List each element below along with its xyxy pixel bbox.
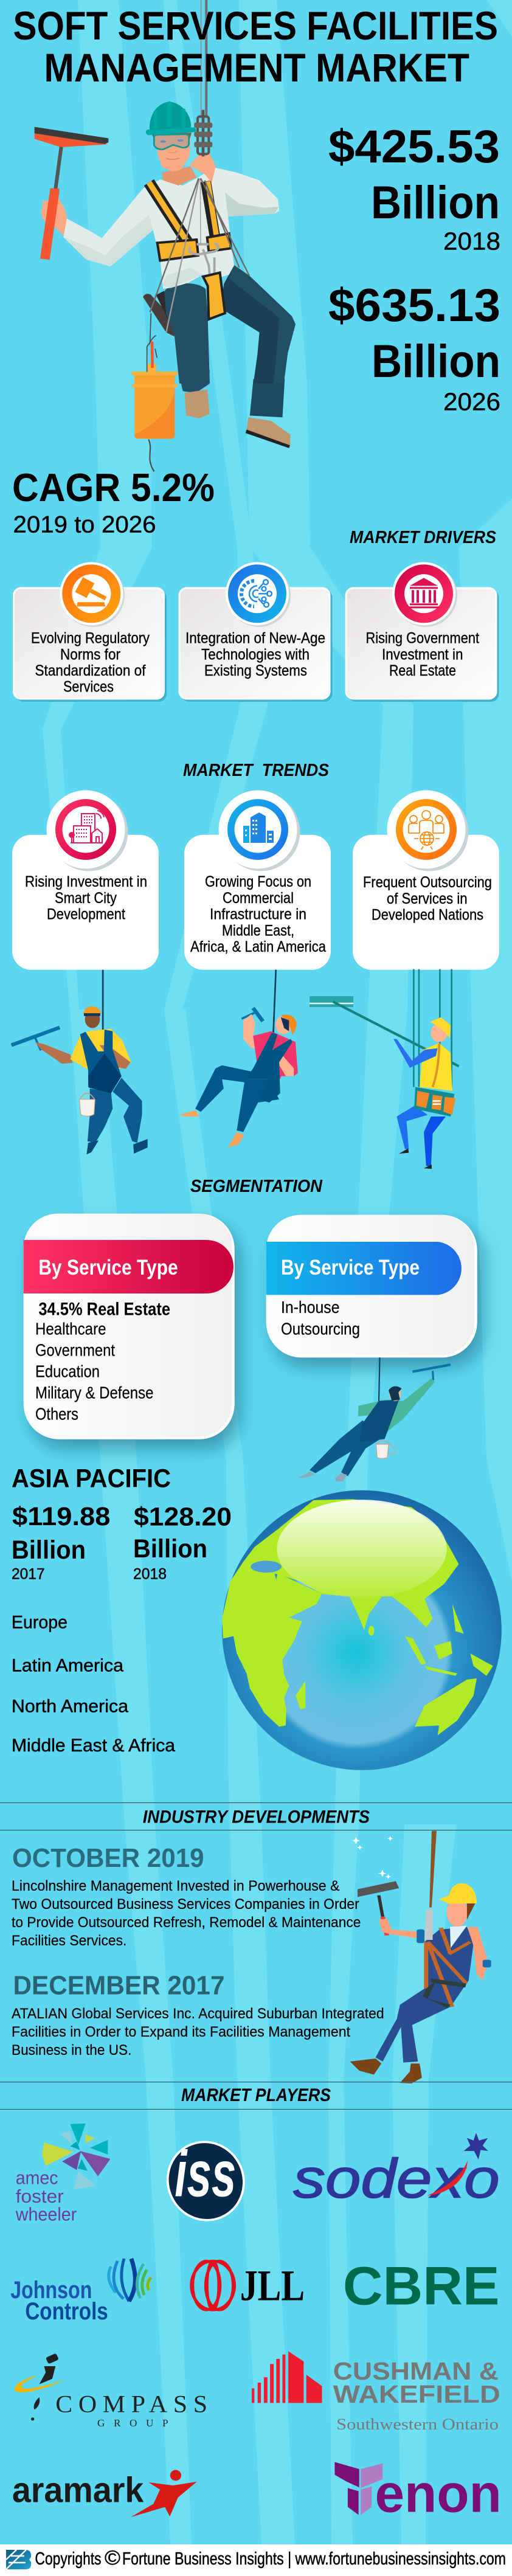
logo: Cushman & Wakefield: Southwestern Ontario (336, 2415, 499, 2433)
shirt (63, 167, 279, 289)
label (190, 873, 326, 955)
text block: october 2019: to Provide Outsourced Refresh, Remodel & Maintenance (12, 1914, 361, 1931)
title: MANAGEMENT MARKET (44, 45, 469, 90)
text block: other regions (12, 1613, 175, 1756)
label: Infrastructure in (210, 906, 306, 923)
text block: asia pacific: $128.20 (134, 1503, 232, 1532)
logo: Compass Group: COMPASS (55, 2390, 207, 2417)
illustration: hero window cleaner (35, 0, 296, 471)
text block: asia pacific (12, 1464, 232, 1583)
illustration: worker with long pole (310, 969, 458, 1169)
text block: asia pacific: Billion (12, 1536, 86, 1565)
market size 2018: $425.53 (328, 121, 500, 173)
upper body and tools (35, 0, 296, 384)
text block: other regions: North America (12, 1697, 128, 1716)
copyright text: Copyrights (35, 2549, 101, 2569)
heading: market drivers: MARKET DRIVERS (350, 528, 497, 547)
label: Rising Government (366, 629, 479, 646)
panel: by service type, end use: Education (35, 1362, 100, 1381)
label: Smart City (55, 890, 117, 907)
panel: driver 3 (346, 562, 499, 702)
logos (10, 2124, 502, 2524)
icon: gear network (241, 580, 272, 607)
logo: Compass Group: GROUP (97, 2417, 168, 2429)
panel: by service type, sourcing: In-house (281, 1298, 339, 1317)
CAGR: CAGR 5.2% (12, 465, 215, 510)
text block: asia pacific: 2017 (12, 1566, 45, 1583)
copyright text: © (105, 2546, 120, 2569)
CAGR (12, 465, 215, 538)
bucket rope (147, 313, 157, 372)
logo: Johnson Controls: Controls (25, 2298, 108, 2325)
logo: ISS (159, 2134, 253, 2228)
label: Real Estate (389, 662, 456, 679)
icon: gavel (75, 577, 106, 606)
text block: asia pacific: 2018 (133, 1566, 167, 1583)
icon: government building (409, 578, 439, 608)
label: Growing Focus on (205, 873, 311, 890)
label: Middle East, (222, 923, 294, 940)
panel: by service type, end use: Others (35, 1405, 78, 1423)
text block: asia pacific: $119.88 (12, 1502, 111, 1531)
logo: ISS: iss (175, 2138, 236, 2210)
head and hand (146, 102, 196, 185)
illustration: worker with pink shirt (179, 970, 298, 1148)
panel: by service type, end use: Government (35, 1340, 115, 1359)
text block: december 2017 (12, 1970, 384, 2058)
heading: industry developments: INDUSTRY DEVELOPMENTS (143, 1807, 370, 1827)
label (185, 629, 325, 679)
panel: driver 2 (179, 562, 332, 702)
panel: driver 1 (13, 562, 167, 702)
text block: october 2019: Lincolnshire Management Invested in Powerhouse & (12, 1878, 339, 1894)
market size 2018 (328, 121, 500, 255)
logo: Johnson Controls: Johnson (10, 2277, 92, 2304)
logo: JLL (192, 2261, 305, 2310)
text block: december 2017: DECEMBER 2017 (13, 1970, 225, 2000)
label: Development (47, 906, 125, 923)
logo: Johnson Controls (10, 2259, 151, 2325)
text block: december 2017: Facilities in Order to Expand its Facilities Management (12, 2024, 350, 2040)
label: Norms for (60, 646, 120, 663)
logo: Cushman & Wakefield: WAKEFIELD (333, 2380, 500, 2408)
hand on rope and clamp (190, 110, 216, 182)
illustration: worker with yellow helmet (350, 1831, 491, 2083)
CAGR: 2019 to 2026 (13, 511, 156, 538)
text block: october 2019: OCTOBER 2019 (12, 1843, 204, 1873)
illustration: worker hanging from panel (298, 1357, 451, 1481)
text block: other regions: Europe (12, 1613, 67, 1633)
icon: smart city (69, 811, 104, 843)
icon: commercial buildings (243, 812, 274, 843)
label: Services (63, 679, 114, 696)
label: Standardization of (35, 662, 146, 679)
harness (149, 178, 249, 333)
footer (0, 2544, 512, 2576)
label: Frequent Outsourcing (363, 874, 492, 891)
label: Developed Nations (372, 906, 483, 923)
text block: asia pacific: ASIA PACIFIC (12, 1464, 171, 1494)
logo: Tenon: enon (375, 2464, 502, 2524)
panel: trend 2 (184, 791, 331, 970)
text block: october 2019 (12, 1843, 361, 1949)
panel: by service type, end use: By Service Type (38, 1256, 178, 1279)
logo: sodexo: sodexo (293, 2147, 500, 2209)
text block: october 2019: Facilities Services. (12, 1933, 126, 1949)
label: Commercial (223, 890, 294, 907)
text block: asia pacific: Billion (133, 1534, 207, 1563)
label: Evolving Regulatory (31, 629, 150, 646)
icon: Fortune Business Insights logo (6, 2550, 31, 2569)
text block: december 2017: ATALIAN Global Services Inc. Acquired Suburban Integrated (12, 2006, 384, 2022)
label: Rising Investment in (25, 873, 147, 890)
panel: trend 1 (12, 791, 159, 970)
market size 2026: 2026 (443, 388, 500, 416)
label (31, 629, 150, 696)
market size 2026: Billion (372, 336, 500, 387)
panel: by service type, end use: Military & Defense (35, 1383, 153, 1402)
title (13, 3, 498, 90)
panel: by service type, sourcing: Outsourcing (281, 1320, 360, 1338)
icon: people and globe (409, 811, 444, 850)
trousers (164, 265, 296, 384)
market size 2018: Billion (371, 177, 500, 229)
heading: segmentation: SEGMENTATION (190, 1177, 323, 1196)
panel: by service type, sourcing: By Service Type (281, 1256, 420, 1279)
text block: other regions: Latin America (12, 1656, 123, 1676)
heading: market trends: MARKET TRENDS (183, 761, 330, 780)
seat (143, 291, 175, 336)
panel: by service type, end use (24, 1214, 235, 1439)
panel: trend 3 (353, 791, 499, 970)
lower legs, shoes and bucket (131, 364, 291, 471)
label (366, 629, 479, 679)
illustration: globe (222, 1491, 502, 1770)
label: Investment in (382, 646, 463, 663)
label: Existing Systems (204, 662, 307, 679)
logo: Cushman & Wakefield (252, 2352, 500, 2433)
logo: Compass Group (15, 2353, 207, 2429)
logo: amec foster wheeler: wheeler (15, 2204, 77, 2225)
label (25, 873, 147, 923)
logo: aramark (12, 2470, 197, 2517)
label: Integration of New-Age (185, 629, 325, 646)
label (363, 874, 492, 923)
market size 2026 (328, 280, 500, 416)
logo: amec foster wheeler: amec (16, 2168, 58, 2189)
panel: by service type, sourcing (266, 1215, 477, 1357)
logo: JLL: JLL (240, 2262, 305, 2310)
label: of Services in (387, 890, 467, 907)
text block: other regions: Middle East & Africa (12, 1736, 175, 1756)
copyright text (35, 2546, 506, 2569)
text block: october 2019: Two Outsourced Business Services Companies in Order (12, 1896, 359, 1913)
heading: market players: MARKET PLAYERS (181, 2085, 331, 2105)
logo: CBRE: CBRE (343, 2256, 500, 2316)
panel: by service type, end use: 34.5% Real Estate (38, 1300, 170, 1320)
text block: december 2017: Business in the US. (12, 2042, 131, 2058)
panel: by service type, end use: Healthcare (35, 1320, 106, 1338)
logo: Cushman & Wakefield: CUSHMAN & (333, 2357, 499, 2385)
market size 2018: 2018 (443, 227, 500, 255)
squeegee (35, 127, 108, 260)
label: Africa, & Latin America (190, 938, 326, 955)
market size 2026: $635.13 (328, 280, 500, 331)
logo: amec foster wheeler (15, 2124, 111, 2225)
logo: amec foster wheeler: foster (16, 2186, 64, 2207)
illustration: worker with yellow shirt (12, 970, 148, 1155)
logo: aramark: aramark (12, 2470, 144, 2510)
label: Technologies with (201, 646, 310, 663)
